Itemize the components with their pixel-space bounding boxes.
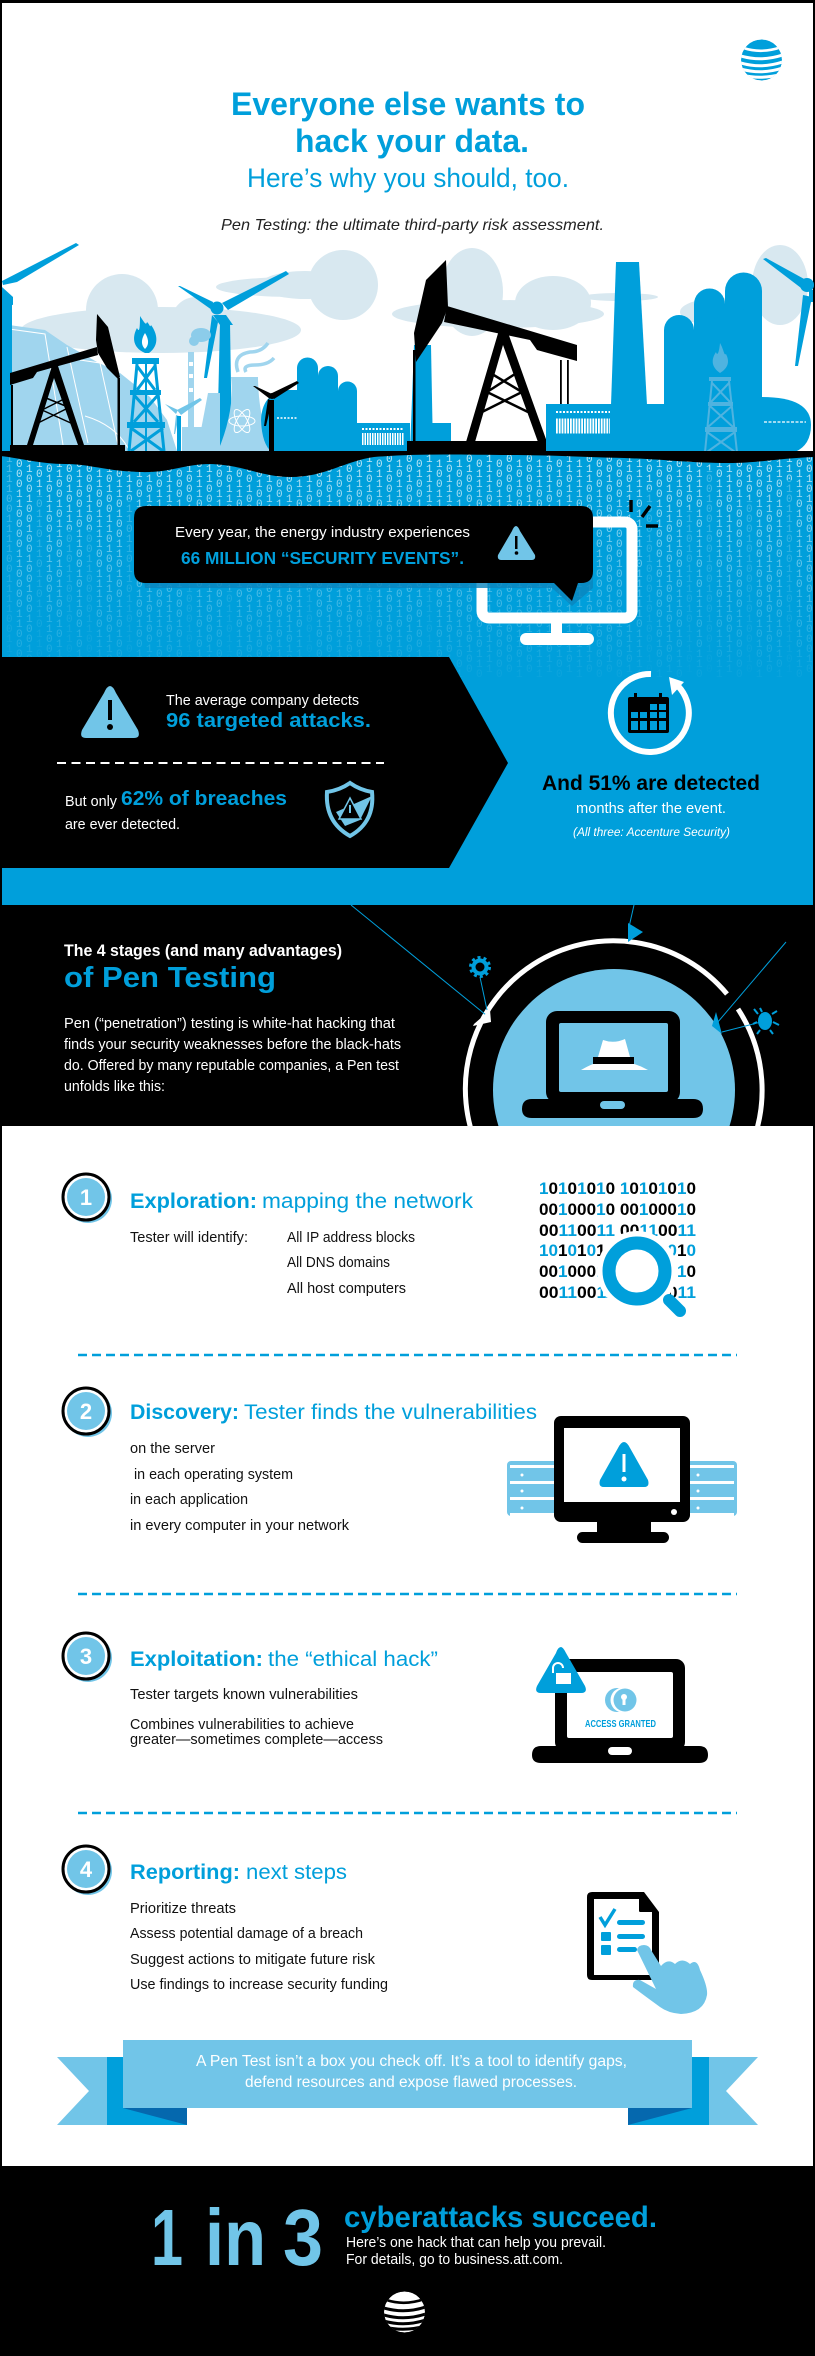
binary rain background: 11000101011100100011010110001101001110010 bbox=[6, 584, 815, 596]
panel: black arrow stats bbox=[0, 657, 508, 868]
callout text: Every year, the energy industry experiences bbox=[175, 524, 470, 541]
details: on the server bbox=[130, 1441, 215, 1457]
binary rain background: 01101001100101101001011001101001100101101 bbox=[16, 459, 815, 471]
binary rain background: 00111010010001101110100100111001011000110 bbox=[16, 529, 815, 541]
icon: warning triangle large bbox=[81, 686, 139, 738]
icon: bug bbox=[753, 1008, 779, 1034]
details: Tester will identify: bbox=[130, 1230, 248, 1246]
binary rain background: 01011100010110100111000101101001011100010 bbox=[16, 509, 815, 521]
icon: white monitor bbox=[482, 500, 658, 645]
heading bbox=[64, 941, 342, 994]
step 3: exploitation bbox=[63, 1633, 708, 1763]
wind turbine right bbox=[763, 258, 814, 366]
binary rain background: 10100011101001011000111010010110100011101 bbox=[16, 619, 815, 631]
heading: Reporting: bbox=[130, 1861, 240, 1884]
binary rain background: 01101001100101101001011001101001100101101 bbox=[16, 639, 815, 651]
details: greater—sometimes complete—access bbox=[130, 1732, 383, 1748]
badge 2: 2 bbox=[80, 1399, 92, 1424]
heading bbox=[130, 1401, 537, 1424]
banner ribbon bbox=[57, 2040, 758, 2125]
binary rain background: 10010110100110010110011010011001011010010 bbox=[6, 544, 815, 556]
binary rain background: 01101001100101101001011001101001100101101 bbox=[16, 519, 815, 531]
heading bbox=[130, 1648, 438, 1671]
details bbox=[130, 1687, 383, 1748]
intro text: do. Offered by many reputable companies, a Pen test bbox=[64, 1057, 400, 1074]
logo: AT&T globe blue bbox=[741, 40, 782, 80]
heading: next steps bbox=[246, 1861, 347, 1884]
icon: laptop access granted bbox=[532, 1647, 708, 1763]
arrow shape bbox=[0, 657, 508, 868]
footer text: Here’s one hack that can help you prevail. bbox=[346, 2234, 606, 2251]
intro text: finds your security weaknesses before the black-hats bbox=[64, 1036, 401, 1053]
details bbox=[130, 1441, 350, 1534]
binary rain background: 10100011101001011000111010010110100011101 bbox=[16, 559, 815, 571]
stat: 96 targeted attacks bbox=[166, 693, 371, 732]
stat text bbox=[542, 772, 760, 839]
binary rain background: 10010110100110010110011010011001011010010 bbox=[6, 514, 815, 526]
black ground wave bbox=[0, 451, 815, 477]
right factory and chimney bbox=[546, 262, 811, 452]
details: in every computer in your network bbox=[130, 1518, 350, 1534]
binary rain background: 10010110100110010110011010011001011010010 bbox=[6, 484, 815, 496]
icon: binary with magnifier: 10101010 10101010 bbox=[539, 1179, 696, 1198]
icon: binary with magnifier: 00110011 00110011 bbox=[539, 1283, 696, 1302]
heading: Exploitation: bbox=[130, 1648, 263, 1671]
icon: binary with magnifier: 00100010 00100010 bbox=[539, 1262, 696, 1281]
details bbox=[130, 1230, 415, 1297]
binary rain background: 11000101011100100011010110001101001110010 bbox=[6, 524, 815, 536]
banner text: A Pen Test isn’t a box you check off. It’s a tool to identify gaps, bbox=[196, 2053, 627, 2070]
heading: Exploration: bbox=[130, 1190, 257, 1213]
oil derrick on factory bbox=[705, 343, 737, 452]
heading bbox=[130, 1190, 474, 1213]
binary rain background: 01011100010110100111000101101001011100010 bbox=[16, 599, 815, 611]
small black turbine bbox=[253, 381, 299, 452]
callout text bbox=[175, 524, 470, 568]
binary rain background: 01011100010110100111000101101001011100010 bbox=[16, 479, 815, 491]
headline: cyberattacks succeed. bbox=[344, 2201, 657, 2234]
icon: gear bbox=[470, 958, 490, 976]
binary rain background: 11000101011100100011010110001101001110010 bbox=[6, 464, 815, 476]
stat text: months after the event. bbox=[576, 800, 726, 817]
binary rain background: 01011100010110100111000101101001011100010 bbox=[16, 539, 815, 551]
stat text: And 51% are detected bbox=[542, 772, 760, 795]
details: All IP address blocks bbox=[287, 1230, 415, 1246]
binary rain background: 10100011101001011000111010010110100011101 bbox=[6, 654, 815, 666]
binary rain background: 00111010010001101110100100111001011000110 bbox=[6, 624, 815, 636]
big stat: 3 bbox=[283, 2193, 323, 2282]
binary rain background: 01101001100101101001011001101001100101101 bbox=[6, 614, 815, 626]
details: Combines vulnerabilities to achieve bbox=[130, 1717, 354, 1733]
details: Prioritize threats bbox=[130, 1901, 236, 1917]
icon: binary with magnifier: 10101010 10101010 bbox=[539, 1241, 696, 1260]
binary rain background: 01101001100101101001011001101001100101101 bbox=[6, 554, 815, 566]
details: Suggest actions to mitigate future risk bbox=[130, 1952, 376, 1968]
heading: Discovery: bbox=[130, 1401, 239, 1424]
cooling tower with atom bbox=[218, 343, 274, 451]
badge 2 bbox=[63, 1388, 112, 1437]
icon: triangle bbox=[628, 923, 643, 942]
binary rain background: 00111010010001101110100100111001011000110 bbox=[16, 649, 815, 661]
small light turbine bbox=[165, 398, 202, 451]
binary rain background: 00111010010001101110100100111001011000110 bbox=[16, 589, 815, 601]
step 1: exploration bbox=[63, 1174, 696, 1311]
illustration: energy skyline bbox=[2, 243, 814, 452]
attack lines bbox=[351, 905, 786, 1032]
callout text: 66 MILLION “SECURITY EVENTS”. bbox=[181, 548, 464, 568]
badge 1: 1 bbox=[80, 1185, 92, 1210]
title bbox=[231, 86, 585, 193]
icon: shield bbox=[327, 783, 372, 836]
distant chimney bbox=[182, 328, 220, 451]
footer text: For details, go to business.att.com. bbox=[346, 2251, 563, 2268]
title: hack your data. bbox=[295, 123, 529, 159]
details bbox=[130, 1901, 388, 1993]
badge 4: 4 bbox=[80, 1857, 93, 1882]
binary rain background: 11000101011100100011010110001101001110010 bbox=[6, 644, 815, 656]
panel: security events bbox=[134, 500, 658, 645]
stat: 62% of breaches: 62% of breaches bbox=[121, 788, 287, 810]
heading bbox=[130, 1861, 347, 1884]
panel: 51% detected bbox=[542, 674, 760, 839]
icon: monitor with servers bbox=[507, 1416, 737, 1543]
icon: calendar in circular arrow bbox=[611, 674, 689, 752]
heading: Tester finds the vulnerabilities bbox=[244, 1401, 537, 1424]
intro text: unfolds like this: bbox=[64, 1078, 165, 1095]
illustration: laptop under attack bbox=[350, 905, 786, 1126]
stat: 96 targeted attacks: The average company detects bbox=[166, 693, 359, 709]
big stat: in bbox=[205, 2193, 266, 2282]
stat: 62% of breaches: are ever detected. bbox=[65, 817, 180, 833]
subtitle: Pen Testing: the ultimate third-party risk assessment. bbox=[221, 217, 604, 234]
callout shadow bbox=[134, 510, 593, 606]
clouds bbox=[21, 245, 808, 353]
heading: mapping the network bbox=[262, 1190, 474, 1213]
pump jack left bbox=[10, 314, 125, 452]
badge 3 bbox=[63, 1633, 112, 1682]
binary rain background: 01101001100101101001011001101001100101101 bbox=[16, 579, 815, 591]
binary rain background: 10100011101001011000111010010110100011101 bbox=[6, 534, 815, 546]
icon: laptop access granted: ACCESS GRANTED bbox=[585, 1719, 656, 1730]
details: All host computers bbox=[287, 1281, 406, 1297]
intro text bbox=[64, 1015, 401, 1095]
icon: warning triangle bbox=[498, 526, 535, 560]
banner text: defend resources and expose flawed processes. bbox=[245, 2074, 577, 2091]
binary rain background: 10100011101001011000111010010110100011101 bbox=[6, 594, 815, 606]
step 4: reporting bbox=[63, 1846, 707, 2014]
badge 1 bbox=[63, 1174, 112, 1223]
footer bbox=[154, 2206, 655, 2332]
binary rain background: 11000101011100100011010110001101001110010 bbox=[16, 609, 815, 621]
binary rain background: 10010110100110010110011010011001011010010 bbox=[6, 454, 815, 466]
icon: binary with magnifier: 00110011 00110011 bbox=[539, 1221, 696, 1240]
big stat bbox=[151, 2193, 323, 2282]
dam panel bbox=[9, 325, 177, 451]
details: in each application bbox=[130, 1492, 248, 1508]
heading: The 4 stages (and many advantages) bbox=[64, 941, 342, 960]
heading: of Pen Testing bbox=[64, 962, 276, 994]
binary rain background: 10100011101001011000111010010110100011101 bbox=[6, 474, 815, 486]
stat text: (All three: Accenture Security) bbox=[573, 825, 730, 839]
stat: 62% of breaches bbox=[65, 788, 287, 833]
details: in each operating system bbox=[134, 1467, 293, 1483]
binary rain background: 10010110100110010110011010011001011010010 bbox=[6, 634, 815, 646]
binary rain background: 00111010010001101110100100111001011000110 bbox=[16, 469, 815, 481]
binary rain background bbox=[6, 454, 815, 681]
details: Use findings to increase security funding bbox=[130, 1977, 388, 1993]
details: Tester targets known vulnerabilities bbox=[130, 1687, 358, 1703]
binary rain background: 00111010010001101110100100111001011000110 bbox=[6, 564, 815, 576]
panel: 4 stages intro bbox=[64, 905, 786, 1126]
details: All DNS domains bbox=[287, 1255, 390, 1271]
binary rain background: 10010110100110010110011010011001011010010 bbox=[6, 604, 815, 616]
binary rain background: 01011100010110100111000101101001011100010 bbox=[16, 659, 815, 671]
pump jack right bbox=[407, 260, 577, 452]
step 2: discovery bbox=[63, 1388, 737, 1543]
icon: checklist with hand bbox=[587, 1892, 707, 2014]
wind turbine 1 bbox=[2, 243, 79, 451]
title: Everyone else wants to bbox=[231, 86, 585, 122]
binary rain background: 01011100010110100111000101101001011100010 bbox=[16, 629, 815, 641]
binary rain background: 11000101011100100011010110001101001110010 bbox=[16, 549, 815, 561]
banner text bbox=[196, 2053, 627, 2091]
binary rain background: 10010110100110010110011010011001011010010 bbox=[6, 574, 815, 586]
heading: the “ethical hack” bbox=[268, 1648, 438, 1671]
icon: binary with magnifier bbox=[539, 1179, 696, 1311]
badge 4 bbox=[63, 1846, 112, 1895]
callout box bbox=[134, 506, 593, 601]
details: Assess potential damage of a breach bbox=[130, 1926, 363, 1942]
binary rain background: 11000101011100100011010110001101001110010 bbox=[16, 489, 815, 501]
binary rain background: 00111010010001101110100100111001011000110 bbox=[6, 504, 815, 516]
footer text bbox=[346, 2234, 606, 2268]
binary rain background: 10010110100110010110011010011001011010010 bbox=[6, 664, 815, 676]
badge 3: 3 bbox=[80, 1644, 92, 1669]
stat: 96 targeted attacks: 96 targeted attacks. bbox=[166, 710, 371, 732]
logo: AT&T globe white bbox=[384, 2292, 425, 2332]
stat: 62% of breaches: But only bbox=[65, 794, 118, 810]
oil derrick left bbox=[127, 316, 165, 451]
icon: laptop with white hat bbox=[522, 1011, 703, 1118]
icon: binary with magnifier: 00100010 00100010 bbox=[539, 1200, 696, 1219]
wind turbine 2 bbox=[178, 271, 289, 451]
binary rain background: 01011100010110100111000101101001011100010 bbox=[16, 569, 815, 581]
binary rain background: 01101001100101101001011001101001100101101 bbox=[6, 494, 815, 506]
blue factory middle bbox=[261, 345, 451, 452]
binary rain background: 10100011101001011000111010010110100011101 bbox=[16, 499, 815, 511]
intro text: Pen (“penetration”) testing is white-hat hacking that bbox=[64, 1015, 396, 1032]
binary rain background: 01101001100101101001011001101001100101101 bbox=[16, 669, 815, 681]
big stat: 1 bbox=[151, 2193, 183, 2282]
title: Here’s why you should, too. bbox=[247, 163, 569, 193]
